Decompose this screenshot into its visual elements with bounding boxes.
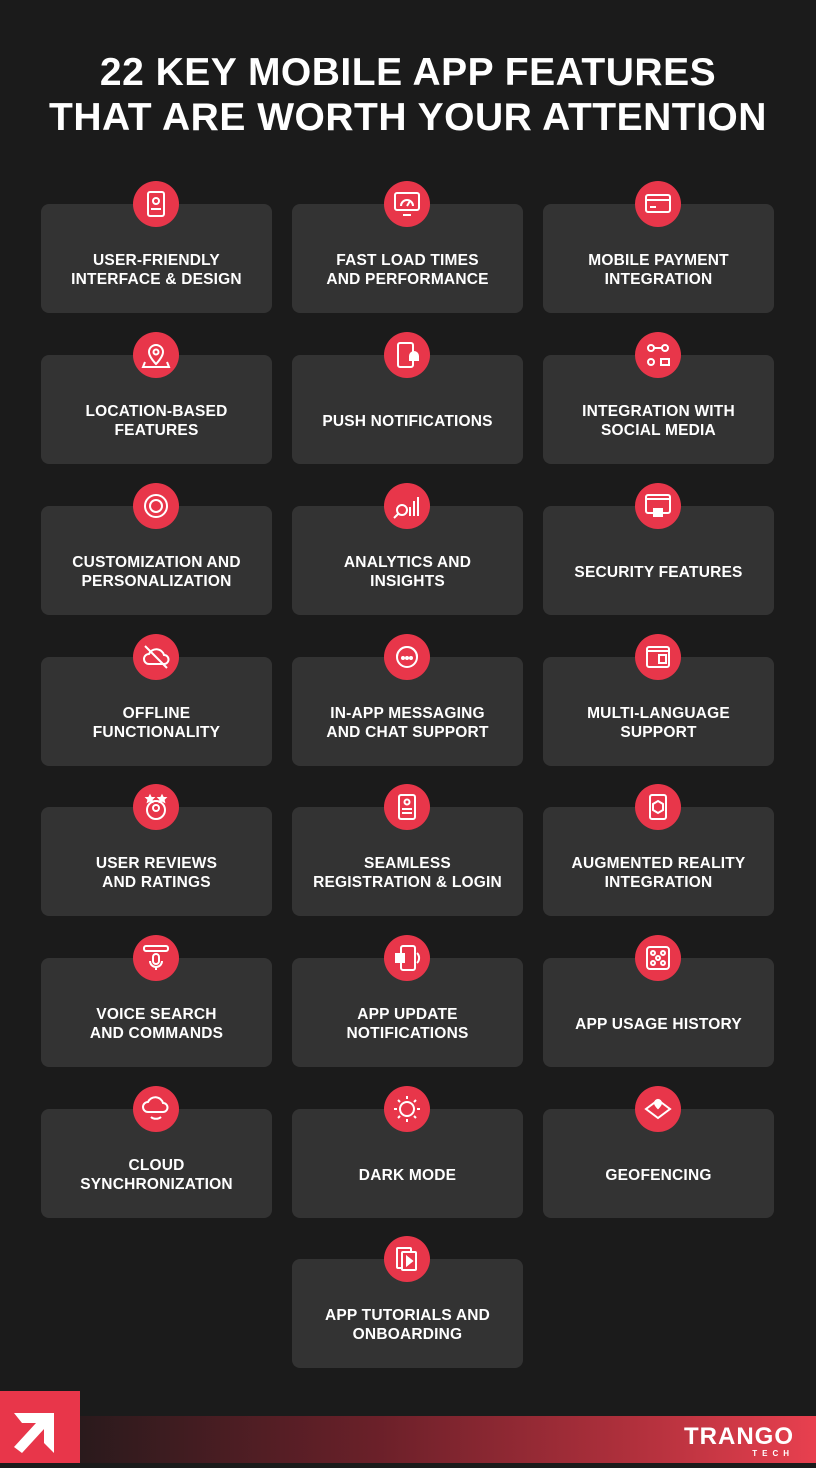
card: customization: CUSTOMIZATION AND bbox=[72, 554, 241, 571]
card: user-friendly interface: INTERFACE & DESIGN bbox=[71, 271, 242, 288]
logo mark bbox=[0, 1391, 80, 1463]
card: push bbox=[292, 355, 523, 464]
card: analytics: ANALYTICS AND bbox=[344, 554, 471, 571]
card: social bbox=[543, 355, 774, 464]
card: offline: FUNCTIONALITY bbox=[93, 724, 220, 741]
card: user-friendly interface bbox=[41, 204, 272, 313]
title: 22 KEY MOBILE APP FEATURES bbox=[100, 51, 716, 94]
card: user-friendly interface: USER-FRIENDLY bbox=[93, 252, 220, 269]
card: registration: SEAMLESS bbox=[364, 855, 451, 872]
card: multi-language: SUPPORT bbox=[620, 724, 697, 741]
card: location: FEATURES bbox=[114, 422, 198, 439]
card: cloud bbox=[41, 1109, 272, 1218]
card: tutorials: ONBOARDING bbox=[353, 1326, 462, 1343]
card: social: SOCIAL MEDIA bbox=[601, 422, 716, 439]
card: reviews: USER REVIEWS bbox=[96, 855, 217, 872]
card: social: INTEGRATION WITH bbox=[582, 403, 735, 420]
card: analytics bbox=[292, 506, 523, 615]
card: multi-language bbox=[543, 657, 774, 766]
card: mobile payment: MOBILE PAYMENT bbox=[588, 252, 729, 269]
card: cloud: SYNCHRONIZATION bbox=[80, 1176, 233, 1193]
footer gradient bar bbox=[80, 1416, 816, 1463]
brand name: TECH bbox=[752, 1449, 794, 1458]
card: reviews bbox=[41, 807, 272, 916]
card: dark mode bbox=[292, 1109, 523, 1218]
card: offline bbox=[41, 657, 272, 766]
card: location bbox=[41, 355, 272, 464]
card: customization: PERSONALIZATION bbox=[82, 573, 231, 590]
card: offline: OFFLINE bbox=[123, 705, 190, 722]
card: messaging: AND CHAT SUPPORT bbox=[326, 724, 489, 741]
card: tutorials: APP TUTORIALS AND bbox=[325, 1307, 490, 1324]
card: app update: NOTIFICATIONS bbox=[346, 1025, 468, 1042]
title bbox=[49, 51, 767, 139]
card: voice: VOICE SEARCH bbox=[96, 1006, 217, 1023]
card: app update: APP UPDATE bbox=[357, 1006, 458, 1023]
card: mobile payment: INTEGRATION bbox=[605, 271, 712, 288]
card: security bbox=[543, 506, 774, 615]
card: voice: AND COMMANDS bbox=[90, 1025, 223, 1042]
card: fast load bbox=[292, 204, 523, 313]
card: dark mode: DARK MODE bbox=[359, 1166, 456, 1184]
card: messaging: IN-APP MESSAGING bbox=[330, 705, 485, 722]
card: registration: REGISTRATION & LOGIN bbox=[313, 874, 502, 891]
card: AR: INTEGRATION bbox=[605, 874, 712, 891]
card: location: LOCATION-BASED bbox=[85, 403, 228, 420]
card: push: PUSH NOTIFICATIONS bbox=[322, 412, 493, 430]
card: voice bbox=[41, 958, 272, 1067]
card: registration bbox=[292, 807, 523, 916]
card: multi-language: MULTI-LANGUAGE bbox=[587, 705, 730, 722]
card: AR bbox=[543, 807, 774, 916]
title: THAT ARE WORTH YOUR ATTENTION bbox=[49, 96, 767, 139]
card: tutorials bbox=[292, 1259, 523, 1368]
card: customization bbox=[41, 506, 272, 615]
card: cloud: CLOUD bbox=[128, 1157, 185, 1174]
card: mobile payment bbox=[543, 204, 774, 313]
card: security: SECURITY FEATURES bbox=[574, 564, 743, 580]
brand name: TRANGO bbox=[684, 1423, 794, 1450]
card: analytics: INSIGHTS bbox=[370, 573, 445, 590]
card: app update bbox=[292, 958, 523, 1067]
card: geofencing bbox=[543, 1109, 774, 1218]
card: messaging bbox=[292, 657, 523, 766]
card: fast load: AND PERFORMANCE bbox=[326, 271, 489, 288]
card: usage history bbox=[543, 958, 774, 1067]
card: reviews: AND RATINGS bbox=[102, 874, 211, 891]
card: fast load: FAST LOAD TIMES bbox=[336, 252, 479, 269]
card: geofencing: GEOFENCING bbox=[605, 1166, 712, 1184]
card: usage history: APP USAGE HISTORY bbox=[575, 1016, 742, 1032]
card: AR: AUGMENTED REALITY bbox=[572, 855, 745, 872]
